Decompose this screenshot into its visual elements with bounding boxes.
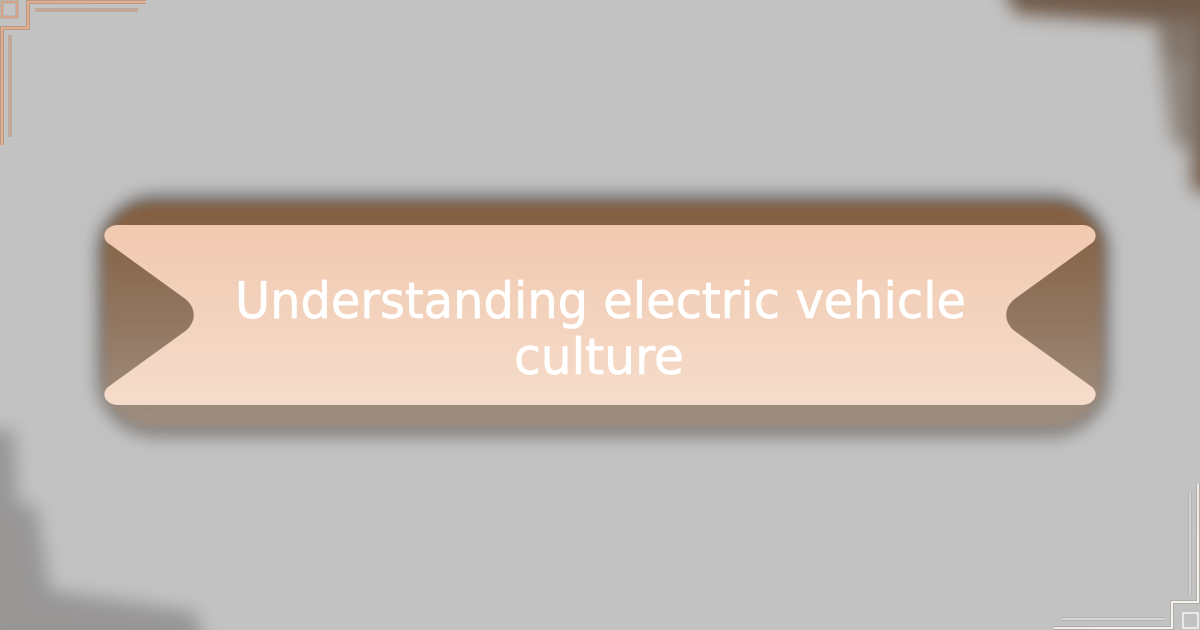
corner ornament: top left (2, 2, 146, 145)
blurred corner shadow: bottom left (0, 430, 206, 630)
corner ornament: bottom right (1054, 484, 1198, 628)
title banner (104, 225, 1096, 405)
ribbon shadow halo (96, 194, 1110, 438)
ribbon shadow (104, 204, 1102, 426)
blurred corner shadow: top right (1000, 0, 1200, 195)
ribbon shape (104, 225, 1096, 405)
title text: culture (514, 328, 684, 386)
title text: Understanding electric vehicle (235, 272, 966, 330)
